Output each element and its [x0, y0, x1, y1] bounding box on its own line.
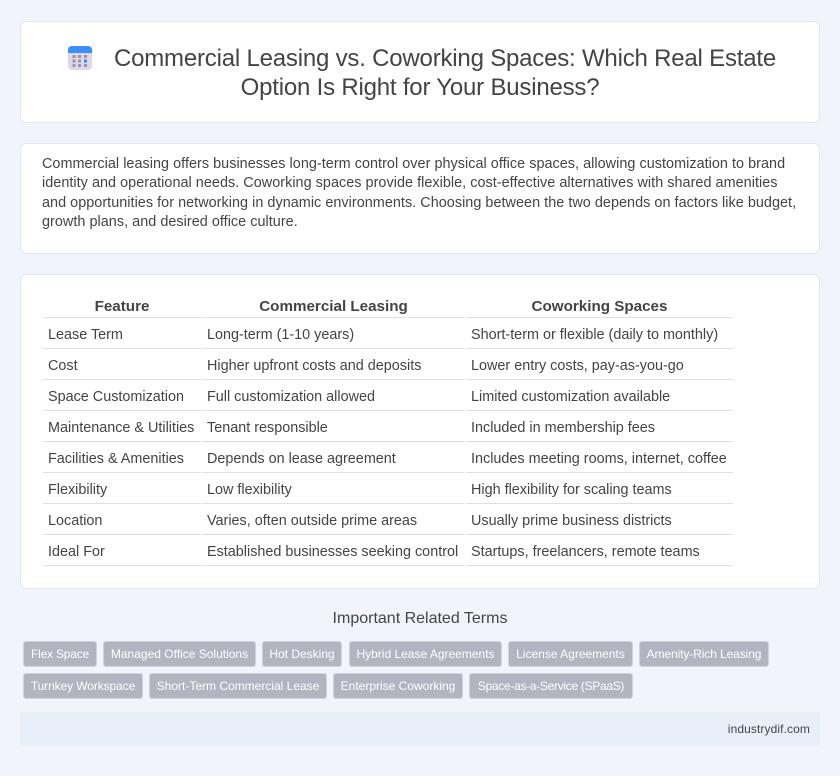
comparison table: Short-term or flexible (daily to monthly) [471, 327, 718, 343]
footer source: industrydif.com [728, 722, 810, 736]
intro text: identity and operational needs. Coworking spaces provide flexible, cost-effective alternatives with shared amenities [42, 175, 778, 191]
related terms tags: Short-Term Commercial Lease [157, 679, 319, 693]
icon: calendar [68, 46, 92, 70]
related terms tags: Hybrid Lease Agreements [356, 647, 495, 661]
comparison table: Higher upfront costs and deposits [207, 358, 421, 374]
related terms tags: Space-as-a-Service (SPaaS) [478, 679, 624, 693]
comparison table: Full customization allowed [207, 389, 375, 405]
comparison table: High flexibility for scaling teams [471, 482, 672, 498]
comparison table: Cost [48, 358, 78, 374]
related terms tags: Hot Desking [269, 647, 335, 661]
related terms tags: Flex Space [31, 647, 89, 661]
panel: introduction [20, 143, 820, 254]
title: Option Is Right for Your Business? [241, 74, 599, 101]
related terms tags [23, 641, 769, 699]
comparison table: Commercial Leasing [259, 298, 408, 315]
comparison table: Space Customization [48, 389, 184, 405]
comparison table: Established businesses seeking control [207, 544, 458, 560]
comparison table: Feature [95, 298, 149, 315]
comparison table: Coworking Spaces [532, 298, 667, 315]
related terms tags: Turnkey Workspace [31, 679, 135, 693]
related terms tags: Enterprise Coworking [341, 679, 455, 693]
comparison table: Facilities & Amenities [48, 451, 184, 467]
comparison table: Low flexibility [207, 482, 292, 498]
comparison table: Location [48, 513, 102, 529]
comparison table: Varies, often outside prime areas [207, 513, 417, 529]
comparison table: Flexibility [48, 482, 107, 498]
panel: comparison table [20, 274, 820, 589]
comparison table: Included in membership fees [471, 420, 655, 436]
comparison table: Maintenance & Utilities [48, 420, 194, 436]
intro text: growth plans, and desired office culture. [42, 214, 298, 230]
related terms tags: License Agreements [516, 647, 625, 661]
comparison table: Tenant responsible [207, 420, 328, 436]
comparison table: Lower entry costs, pay-as-you-go [471, 358, 684, 374]
comparison table [43, 298, 733, 566]
related terms tags: Amenity-Rich Leasing [647, 647, 761, 661]
comparison table: Ideal For [48, 544, 105, 560]
comparison table: Lease Term [48, 327, 123, 343]
footer bar [20, 712, 820, 746]
comparison table: Limited customization available [471, 389, 670, 405]
intro text [42, 156, 796, 230]
comparison table: Depends on lease agreement [207, 451, 396, 467]
related terms heading: Important Related Terms [333, 610, 507, 627]
comparison table: Startups, freelancers, remote teams [471, 544, 700, 560]
title [114, 45, 776, 101]
comparison table: Usually prime business districts [471, 513, 672, 529]
comparison table: Includes meeting rooms, internet, coffee [471, 451, 727, 467]
title: Commercial Leasing vs. Coworking Spaces: Which Real Estate [114, 45, 776, 72]
panel: header [20, 21, 820, 123]
related terms tags: Managed Office Solutions [111, 647, 248, 661]
intro text: and opportunities for networking in dynamic environments. Choosing between the two depends on factors like budget, [42, 195, 796, 211]
intro text: Commercial leasing offers businesses long-term control over physical office spaces, allowing customization to brand [42, 156, 785, 172]
comparison table: Long-term (1-10 years) [207, 327, 354, 343]
